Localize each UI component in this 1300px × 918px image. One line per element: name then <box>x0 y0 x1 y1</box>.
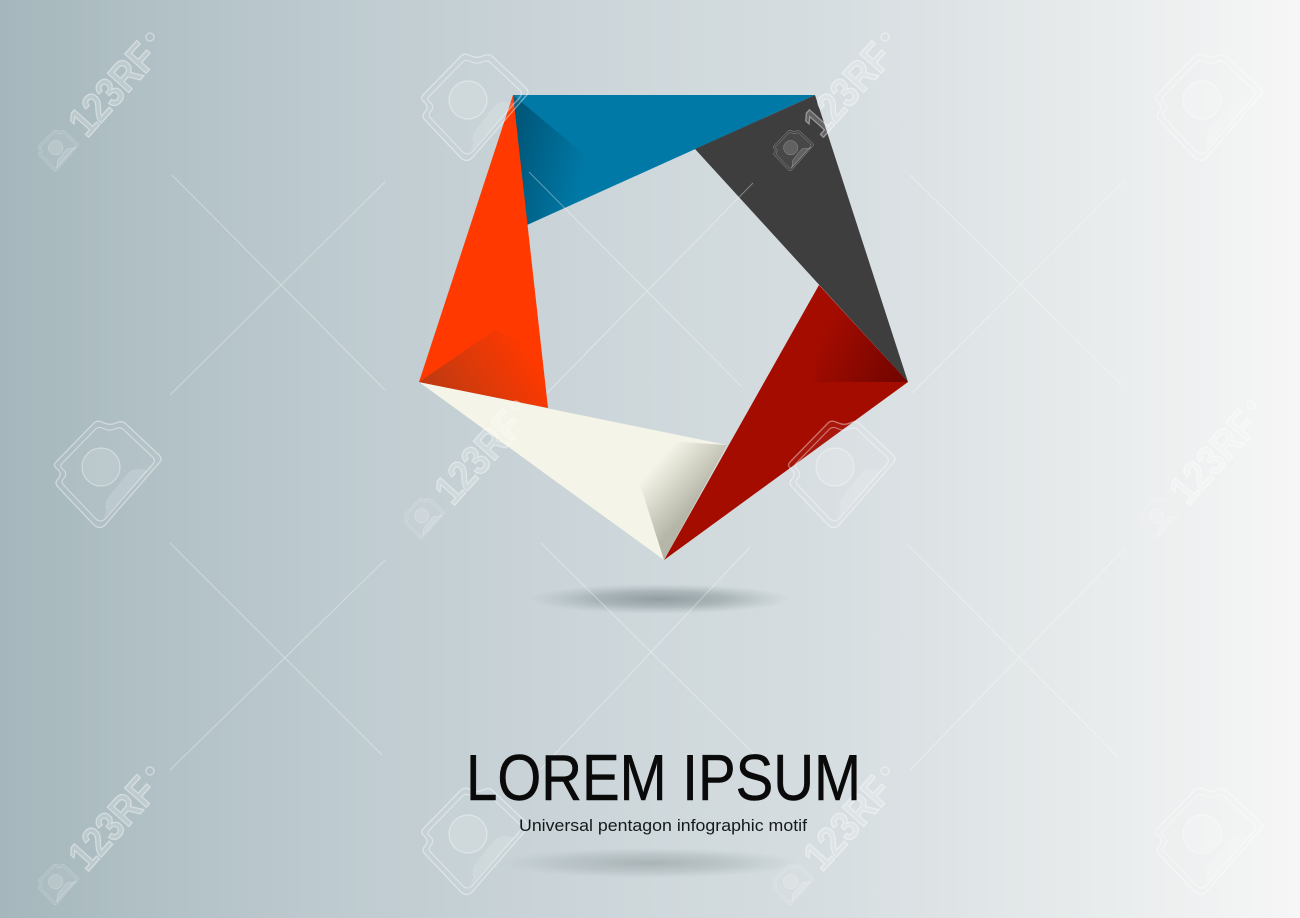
segment: charcoal <box>695 95 908 382</box>
segment: cream <box>419 382 727 560</box>
subtitle: Universal pentagon infographic motif <box>519 816 807 835</box>
segment: orange <box>419 95 548 408</box>
segment: blue <box>513 95 815 225</box>
pentagon motif <box>419 95 908 560</box>
title shadow <box>500 848 800 878</box>
watermark logos: 123RF <box>59 767 166 879</box>
watermark logos: 123RF <box>59 33 166 145</box>
watermark logos: 123RF <box>794 767 901 879</box>
watermark logos: 123RF <box>425 401 532 513</box>
watermark logos: 123RF <box>1160 401 1267 513</box>
pentagon floating shadow <box>529 584 791 614</box>
title: LOREM IPSUM <box>466 741 861 814</box>
segment: dark red <box>664 285 908 560</box>
decorative cross lines <box>170 172 1125 770</box>
watermark logos: 123RF <box>794 33 901 145</box>
